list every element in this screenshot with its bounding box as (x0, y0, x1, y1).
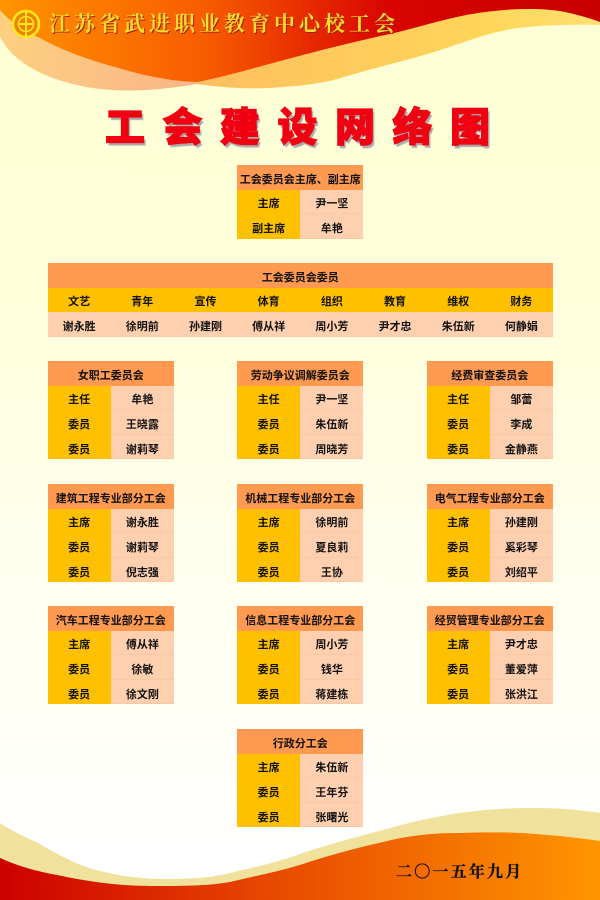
panel: trade and management branch: 董爱萍 (505, 664, 538, 676)
panel: women workers committee: 女职工委员会 (78, 370, 144, 382)
panel: administration branch: 行政分工会 (273, 738, 328, 750)
panel: mechanical engineering branch (237, 484, 363, 582)
panel: audit committee: 主任 (447, 394, 469, 406)
panel: union committee members: 周小芳 (315, 321, 348, 333)
panel: administration branch: 朱伍新 (315, 762, 348, 774)
panel: union committee members: 维权 (447, 296, 469, 308)
panel: union committee members (48, 263, 553, 337)
panel: electrical engineering branch: 电气工程专业部分工会 (435, 493, 545, 505)
panel: mechanical engineering branch: 委员 (258, 542, 280, 554)
panel: union committee members: 谢永胜 (63, 321, 96, 333)
panel: automotive engineering branch: 徐文刚 (126, 689, 159, 701)
panel: labor dispute mediation committee: 委员 (258, 419, 280, 431)
panel: trade and management branch (427, 606, 553, 704)
panel: women workers committee: 主任 (68, 394, 90, 406)
panel: chairman and vice chairman: 副主席 (252, 223, 285, 235)
panel: civil engineering branch: 委员 (68, 567, 90, 579)
banner heading: 江苏省武进职业教育中心校工会 (49, 12, 399, 36)
panel: chairman and vice chairman: 尹一坚 (315, 198, 348, 210)
panel: civil engineering branch: 委员 (68, 542, 90, 554)
panel: audit committee: 金静燕 (505, 444, 538, 456)
panel: audit committee: 邹蕾 (510, 394, 532, 406)
panel: trade and management branch: 张洪江 (505, 689, 538, 701)
panel: electrical engineering branch: 主席 (447, 517, 469, 529)
panel: administration branch: 委员 (258, 812, 280, 824)
panel: civil engineering branch: 主席 (68, 517, 90, 529)
panel: mechanical engineering branch: 机械工程专业部分工会 (245, 493, 355, 505)
panel: electrical engineering branch: 委员 (447, 542, 469, 554)
panel: labor dispute mediation committee: 周晓芳 (315, 444, 348, 456)
panel: information engineering branch: 委员 (258, 664, 280, 676)
panel: electrical engineering branch: 刘绍平 (505, 567, 538, 579)
panel: trade and management branch: 主席 (447, 639, 469, 651)
panel: civil engineering branch: 倪志强 (126, 567, 159, 579)
panel: union committee members: 朱伍新 (442, 321, 475, 333)
panel: trade and management branch: 委员 (447, 689, 469, 701)
panel: labor dispute mediation committee: 劳动争议调解委员会 (251, 370, 350, 382)
panel: chairman and vice chairman: 工会委员会主席、副主席 (240, 174, 361, 186)
panel: women workers committee: 牟艳 (131, 394, 153, 406)
panel: audit committee: 委员 (447, 419, 469, 431)
panel: information engineering branch: 蒋建栋 (315, 689, 348, 701)
date: 二〇一五年九月 (396, 864, 523, 881)
panel: automotive engineering branch: 汽车工程专业部分工会 (56, 615, 166, 627)
panel: mechanical engineering branch: 王协 (321, 567, 343, 579)
panel: electrical engineering branch: 委员 (447, 567, 469, 579)
panel: electrical engineering branch: 孙建刚 (505, 517, 538, 529)
panel: union committee members: 宣传 (194, 296, 216, 308)
icon: union logo (12, 10, 40, 38)
panel: union committee members: 财务 (510, 296, 532, 308)
panel: automotive engineering branch: 委员 (68, 664, 90, 676)
panel: women workers committee (48, 361, 174, 459)
panel: audit committee: 委员 (447, 444, 469, 456)
panel: information engineering branch: 信息工程专业部分工会 (245, 615, 355, 627)
panel: trade and management branch: 尹才忠 (505, 639, 538, 651)
panel: labor dispute mediation committee: 朱伍新 (315, 419, 348, 431)
panel: automotive engineering branch: 傅从祥 (126, 639, 159, 651)
panel: union committee members: 孙建刚 (189, 321, 222, 333)
panel: women workers committee: 谢莉琴 (126, 444, 159, 456)
panel: chairman and vice chairman: 牟艳 (321, 223, 343, 235)
panel: union committee members: 体育 (258, 296, 280, 308)
panel: union committee members: 组织 (321, 296, 343, 308)
panel: automotive engineering branch: 徐敏 (131, 664, 153, 676)
panel: information engineering branch (237, 606, 363, 704)
panel: labor dispute mediation committee (237, 361, 363, 459)
panel: administration branch: 委员 (258, 787, 280, 799)
panel: administration branch (237, 729, 363, 827)
panel: information engineering branch: 钱华 (321, 664, 343, 676)
panel: union committee members: 工会委员会委员 (262, 272, 339, 284)
panel: administration branch: 王年芬 (315, 787, 348, 799)
panel: chairman and vice chairman (237, 165, 363, 239)
panel: mechanical engineering branch: 夏良莉 (315, 542, 348, 554)
panel: union committee members: 教育 (384, 296, 406, 308)
title: 工会建设网络图 (105, 106, 508, 150)
panel: audit committee (427, 361, 553, 459)
panel: civil engineering branch: 谢莉琴 (126, 542, 159, 554)
panel: administration branch: 张曙光 (315, 812, 348, 824)
panel: chairman and vice chairman: 主席 (258, 198, 280, 210)
panel: trade and management branch: 委员 (447, 664, 469, 676)
panel: information engineering branch: 委员 (258, 689, 280, 701)
panel: union committee members: 何静娟 (505, 321, 538, 333)
panel: labor dispute mediation committee: 尹一坚 (315, 394, 348, 406)
panel: electrical engineering branch (427, 484, 553, 582)
panel: audit committee: 经费审查委员会 (451, 370, 528, 382)
panel: civil engineering branch: 建筑工程专业部分工会 (56, 493, 166, 505)
panel: information engineering branch: 周小芳 (315, 639, 348, 651)
panel: trade and management branch: 经贸管理专业部分工会 (435, 615, 545, 627)
panel: electrical engineering branch: 奚彩琴 (505, 542, 538, 554)
panel: automotive engineering branch (48, 606, 174, 704)
panel: union committee members: 青年 (131, 296, 153, 308)
panel: information engineering branch: 主席 (258, 639, 280, 651)
panel: women workers committee: 王晓露 (126, 419, 159, 431)
panel: audit committee: 李成 (510, 419, 532, 431)
panel: union committee members: 徐明前 (126, 321, 159, 333)
panel: women workers committee: 委员 (68, 444, 90, 456)
panel: mechanical engineering branch: 徐明前 (315, 517, 348, 529)
panel: mechanical engineering branch: 主席 (258, 517, 280, 529)
panel: union committee members: 傅从祥 (252, 321, 285, 333)
panel: union committee members: 尹才忠 (379, 321, 412, 333)
panel: women workers committee: 委员 (68, 419, 90, 431)
panel: labor dispute mediation committee: 委员 (258, 444, 280, 456)
panel: automotive engineering branch: 委员 (68, 689, 90, 701)
panel: union committee members: 文艺 (68, 296, 90, 308)
panel: civil engineering branch: 谢永胜 (126, 517, 159, 529)
panel: administration branch: 主席 (258, 762, 280, 774)
panel: automotive engineering branch: 主席 (68, 639, 90, 651)
panel: mechanical engineering branch: 委员 (258, 567, 280, 579)
panel: civil engineering branch (48, 484, 174, 582)
panel: labor dispute mediation committee: 主任 (258, 394, 280, 406)
